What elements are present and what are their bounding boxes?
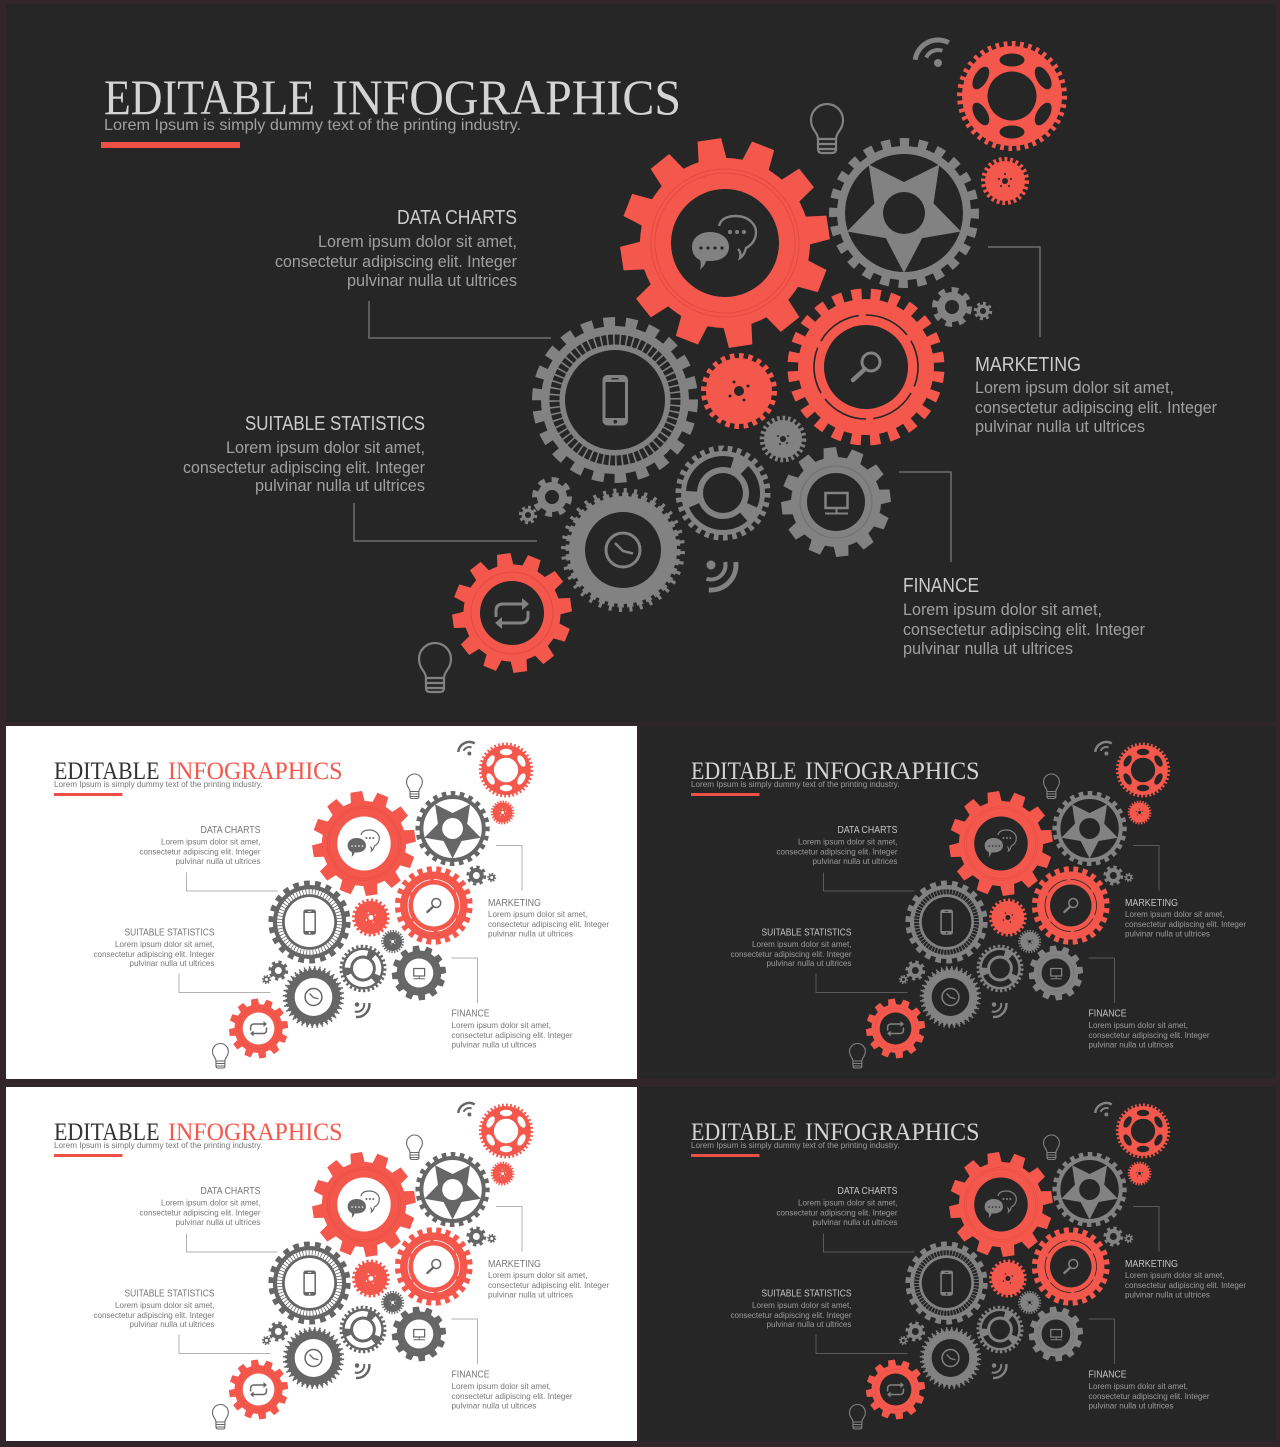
text block: finance: pulvinar nulla ut ultrices [903, 639, 1073, 658]
subtitle: Lorem Ipsum is simply dummy text of the printing industry. [54, 780, 262, 789]
title [691, 758, 980, 785]
icon: phone [602, 375, 628, 426]
title [54, 1119, 342, 1146]
text block: finance: consectetur adipiscing elit. Integer [1088, 1030, 1210, 1040]
gear cluster [419, 40, 1064, 692]
leader lines [354, 247, 1040, 562]
text block: data charts [275, 207, 517, 290]
title [691, 1119, 980, 1146]
title: INFOGRAPHICS [805, 1119, 980, 1146]
text block: data charts: DATA CHARTS [838, 1186, 898, 1197]
text block: finance: pulvinar nulla ut ultrices [452, 1400, 536, 1410]
text block: data charts [776, 1186, 898, 1227]
gear: gray star wheel [830, 139, 978, 287]
icon: chat bubbles [692, 216, 756, 270]
text block: marketing: Lorem ipsum dolor sit amet, [975, 378, 1174, 397]
text block: suitable statistics: SUITABLE STATISTICS [762, 928, 852, 938]
text block: suitable statistics: pulvinar nulla ut ultrices [255, 476, 425, 495]
text block: suitable statistics: Lorem ipsum dolor sit amet, [115, 939, 214, 949]
title underline [691, 793, 760, 796]
text block: suitable statistics [730, 1288, 852, 1329]
text block: marketing: pulvinar nulla ut ultrices [1125, 1290, 1210, 1300]
text block: finance: Lorem ipsum dolor sit amet, [452, 1381, 551, 1391]
gear: gray with monitor [764, 430, 908, 574]
title: INFOGRAPHICS [332, 69, 681, 125]
text block: data charts: Lorem ipsum dolor sit amet, [161, 836, 260, 846]
title: EDITABLE [691, 758, 796, 785]
slide content [54, 1103, 609, 1429]
text block: suitable statistics [94, 1288, 215, 1329]
text block: finance: consectetur adipiscing elit. Integer [452, 1030, 573, 1040]
text block: suitable statistics: consectetur adipiscing elit. Integer [730, 1310, 852, 1320]
text block: suitable statistics [94, 928, 215, 968]
title underline [101, 142, 240, 148]
title: EDITABLE [691, 1119, 796, 1146]
text block: finance: pulvinar nulla ut ultrices [1088, 1400, 1174, 1410]
text block: finance: consectetur adipiscing elit. Integer [452, 1391, 573, 1401]
text block: data charts: consectetur adipiscing elit. Integer [140, 846, 261, 856]
icon: light bulb lower [419, 643, 451, 692]
text block: data charts: consectetur adipiscing elit. Integer [776, 846, 898, 856]
text block: data charts: pulvinar nulla ut ultrices [812, 856, 898, 866]
leader lines [816, 1206, 1159, 1364]
gear cluster [850, 742, 1169, 1068]
panel: large dark slide [6, 4, 1276, 722]
text block: data charts [140, 825, 261, 866]
slide content [54, 742, 609, 1068]
text block: marketing: consectetur adipiscing elit. Integer [488, 919, 609, 929]
title [104, 69, 681, 125]
text block: suitable statistics: consectetur adipiscing elit. Integer [94, 1310, 215, 1320]
text block: suitable statistics: SUITABLE STATISTICS [124, 1288, 215, 1300]
text block: finance: consectetur adipiscing elit. Integer [1088, 1391, 1210, 1401]
text block: finance: FINANCE [1088, 1008, 1127, 1020]
panel: white slide top [6, 726, 637, 1079]
icon: monitor [825, 493, 848, 514]
text block: finance [1088, 1370, 1210, 1410]
text block: suitable statistics: Lorem ipsum dolor sit amet, [752, 939, 852, 949]
panel: dark slide bottom right [640, 1087, 1276, 1441]
icon: refresh arrows [495, 598, 529, 629]
text block: marketing [975, 354, 1217, 436]
text block: marketing: consectetur adipiscing elit. Integer [1125, 919, 1246, 929]
panel: dark slide top right [640, 726, 1276, 1079]
text block: suitable statistics: Lorem ipsum dolor sit amet, [226, 438, 425, 457]
gear: red sprocket [960, 44, 1064, 148]
text block: suitable statistics: consectetur adipiscing elit. Integer [183, 458, 425, 477]
text block: suitable statistics: Lorem ipsum dolor sit amet, [115, 1300, 214, 1310]
text block: finance: Lorem ipsum dolor sit amet, [452, 1020, 551, 1030]
text block: data charts: consectetur adipiscing elit. Integer [776, 1208, 898, 1218]
text block: data charts: Lorem ipsum dolor sit amet, [798, 836, 898, 846]
text block: finance: FINANCE [1088, 1370, 1127, 1380]
text block: suitable statistics: SUITABLE STATISTICS [124, 928, 215, 938]
text block: suitable statistics: pulvinar nulla ut ultrices [766, 1319, 852, 1329]
title underline [691, 1154, 760, 1157]
title underline [54, 1154, 122, 1157]
text block: data charts: DATA CHARTS [397, 207, 517, 229]
title [54, 758, 342, 785]
text block: finance: Lorem ipsum dolor sit amet, [1088, 1020, 1188, 1030]
text block: marketing: MARKETING [975, 354, 1081, 376]
gear cluster [213, 1103, 532, 1429]
title underline [54, 793, 122, 796]
text block: marketing: consectetur adipiscing elit. Integer [1125, 1280, 1246, 1290]
icon: light bulb upper [811, 104, 843, 153]
text block: finance: FINANCE [903, 575, 979, 597]
text block: marketing: pulvinar nulla ut ultrices [1125, 928, 1210, 938]
text block: suitable statistics: pulvinar nulla ut ultrices [130, 958, 214, 968]
leader lines [179, 846, 522, 1003]
subtitle: Lorem Ipsum is simply dummy text of the printing industry. [104, 117, 521, 134]
text block: data charts: DATA CHARTS [200, 825, 261, 836]
icon: clock [606, 533, 640, 567]
text block: suitable statistics: SUITABLE STATISTICS [245, 413, 425, 435]
text block: data charts: Lorem ipsum dolor sit amet, [318, 232, 517, 251]
text block: marketing [1125, 1259, 1246, 1300]
text block: suitable statistics: consectetur adipiscing elit. Integer [94, 949, 215, 959]
text block: marketing: pulvinar nulla ut ultrices [488, 1290, 573, 1300]
gear: gray with phone [537, 322, 693, 478]
gear: small red top [984, 160, 1026, 202]
text block: finance [452, 1370, 573, 1410]
text block: data charts: pulvinar nulla ut ultrices [176, 856, 260, 866]
text block: finance [452, 1008, 573, 1050]
text block: finance: Lorem ipsum dolor sit amet, [903, 600, 1102, 619]
text block: marketing: MARKETING [1125, 898, 1178, 909]
text block: finance: pulvinar nulla ut ultrices [1088, 1040, 1174, 1050]
text block: data charts: pulvinar nulla ut ultrices [347, 271, 517, 290]
slide content [691, 1103, 1246, 1429]
icon: magnifier [853, 353, 880, 380]
text block: marketing: consectetur adipiscing elit. Integer [488, 1280, 609, 1290]
text block: suitable statistics [183, 413, 425, 495]
text block: marketing: Lorem ipsum dolor sit amet, [1125, 1270, 1224, 1280]
gear cluster [213, 742, 532, 1068]
text block: suitable statistics [730, 928, 852, 968]
text block: marketing [488, 898, 609, 938]
text block: finance: pulvinar nulla ut ultrices [452, 1040, 536, 1050]
slide content [691, 742, 1246, 1068]
text block: data charts: DATA CHARTS [200, 1186, 261, 1197]
text block: data charts [140, 1186, 261, 1227]
gear: red with magnifier [790, 291, 942, 443]
text block: data charts: pulvinar nulla ut ultrices [176, 1217, 260, 1227]
panel: white slide bottom [6, 1087, 637, 1441]
gear: red mid small [704, 356, 774, 426]
text block: marketing: MARKETING [488, 1259, 541, 1270]
gear: gray three-arc wheel [678, 448, 768, 538]
text block: marketing [1125, 898, 1246, 938]
gear: gray with clock [564, 492, 682, 608]
text block: finance [1088, 1008, 1210, 1050]
leader lines [179, 1206, 522, 1364]
text block: suitable statistics: SUITABLE STATISTICS [762, 1288, 852, 1300]
text block: suitable statistics: pulvinar nulla ut ultrices [766, 958, 852, 968]
text block: marketing: Lorem ipsum dolor sit amet, [488, 1270, 588, 1280]
text block: data charts: pulvinar nulla ut ultrices [812, 1217, 898, 1227]
text block: marketing: Lorem ipsum dolor sit amet, [488, 909, 588, 919]
text block: data charts: DATA CHARTS [838, 825, 898, 836]
text block: marketing: MARKETING [1125, 1259, 1178, 1270]
text block: finance: FINANCE [452, 1370, 490, 1380]
text block: marketing: Lorem ipsum dolor sit amet, [1125, 909, 1224, 919]
text block: suitable statistics: pulvinar nulla ut ultrices [130, 1319, 214, 1329]
icon: wifi lower [706, 560, 736, 590]
title: EDITABLE [104, 69, 315, 125]
cogs: small pair lower [520, 480, 569, 523]
text block: suitable statistics: consectetur adipiscing elit. Integer [730, 949, 852, 959]
title: EDITABLE [54, 758, 160, 785]
gear: gray mini spiked [762, 418, 804, 460]
icon: wifi upper [915, 40, 949, 67]
text block: data charts: Lorem ipsum dolor sit amet, [798, 1198, 898, 1208]
gear: red with refresh icon [434, 535, 590, 691]
text block: finance [903, 575, 1145, 658]
text block: marketing: pulvinar nulla ut ultrices [488, 928, 573, 938]
text block: suitable statistics: Lorem ipsum dolor sit amet, [752, 1300, 852, 1310]
text block: finance: FINANCE [452, 1008, 490, 1020]
gear cluster [850, 1103, 1169, 1429]
text block: finance: Lorem ipsum dolor sit amet, [1088, 1381, 1188, 1391]
text block: marketing: pulvinar nulla ut ultrices [975, 417, 1145, 436]
text block: data charts: consectetur adipiscing elit. Integer [275, 252, 517, 271]
text block: finance: consectetur adipiscing elit. Integer [903, 620, 1145, 639]
title: INFOGRAPHICS [805, 758, 980, 785]
subtitle: Lorem Ipsum is simply dummy text of the printing industry. [691, 1141, 900, 1150]
text block: marketing [488, 1259, 609, 1300]
title: EDITABLE [54, 1119, 160, 1146]
gear: large red with chat icon [590, 108, 860, 378]
text block: data charts: Lorem ipsum dolor sit amet, [161, 1198, 260, 1208]
text block: data charts [776, 825, 898, 866]
leader lines [816, 846, 1159, 1003]
title: INFOGRAPHICS [168, 758, 342, 785]
text block: marketing: MARKETING [488, 898, 541, 909]
subtitle: Lorem Ipsum is simply dummy text of the printing industry. [54, 1141, 262, 1150]
title: INFOGRAPHICS [168, 1119, 342, 1146]
text block: data charts: consectetur adipiscing elit. Integer [140, 1208, 261, 1218]
text block: marketing: consectetur adipiscing elit. Integer [975, 398, 1217, 417]
cogs: small pair upper [935, 290, 991, 324]
subtitle: Lorem Ipsum is simply dummy text of the printing industry. [691, 780, 900, 789]
